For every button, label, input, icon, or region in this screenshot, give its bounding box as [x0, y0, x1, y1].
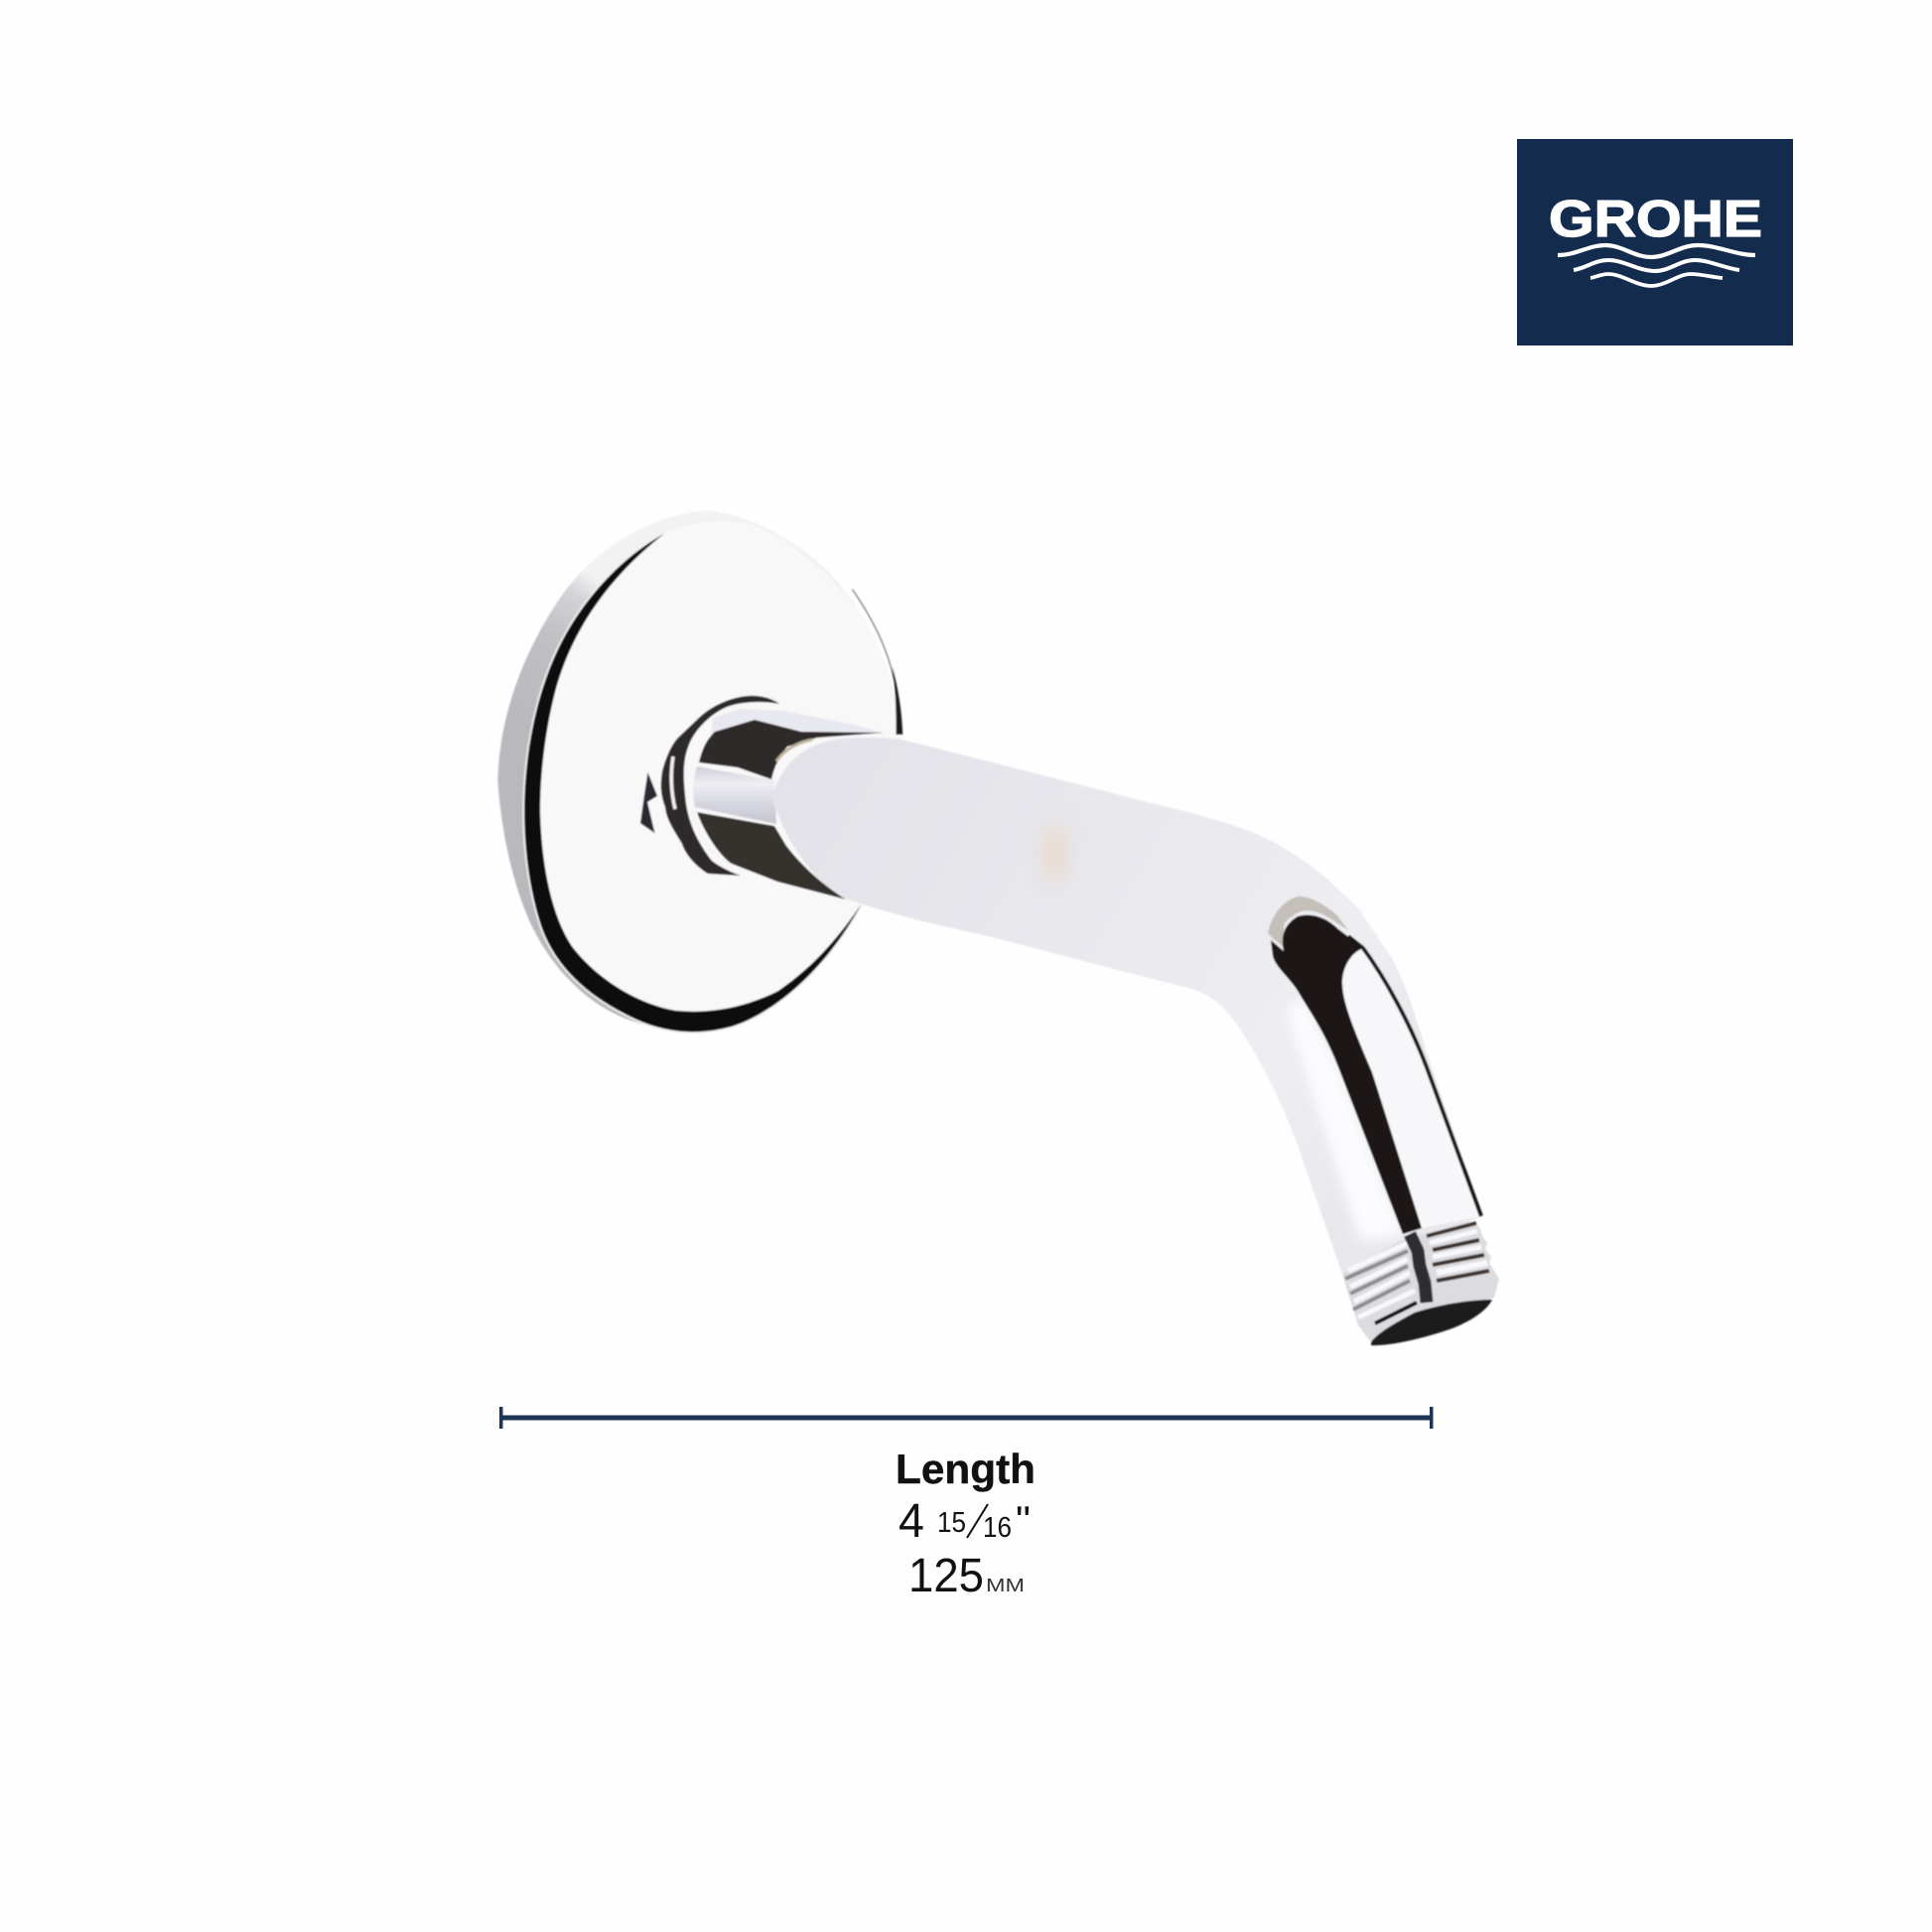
neck dark lower — [697, 812, 846, 899]
nut and neck — [661, 696, 884, 899]
nut crescent — [661, 696, 779, 876]
flange rim — [497, 510, 902, 1033]
heading: Length: Length — [896, 1446, 1035, 1492]
length in inches: 16 — [983, 1512, 1012, 1544]
logo background — [1517, 139, 1793, 345]
nut inner white line — [692, 809, 732, 866]
dimension label — [896, 1446, 1035, 1602]
arm body — [772, 738, 1482, 1274]
tube right bright strip — [1342, 948, 1481, 1228]
flange dark crescent reflection — [524, 533, 861, 1032]
neck bronze highlight — [776, 740, 812, 761]
dimension line — [499, 1407, 1434, 1429]
tube right edge line — [1348, 936, 1481, 1216]
lower tube reflections — [1268, 897, 1481, 1241]
length in millimetres: MM — [986, 1576, 1025, 1595]
thread ridges — [1345, 1223, 1489, 1323]
neck silver middle — [693, 766, 776, 824]
nut inner highlight — [671, 757, 675, 809]
length in millimetres — [908, 1550, 1025, 1602]
length in inches — [898, 1495, 1031, 1548]
pipe opening — [1371, 1300, 1492, 1345]
arm smudge — [1040, 824, 1068, 884]
flange right edge thick — [893, 666, 902, 735]
length in inches: " — [1016, 1499, 1031, 1543]
logo waves — [1558, 245, 1755, 286]
wall flange plate — [497, 510, 902, 1033]
tube left bright band — [1287, 996, 1405, 1241]
logo: GROHE — [1517, 139, 1793, 345]
logo wordmark: GROHE — [1549, 191, 1762, 248]
length in millimetres: 125 — [908, 1550, 984, 1602]
tube dark streak — [1271, 915, 1422, 1234]
flange face — [540, 521, 901, 1012]
threaded end — [1342, 1221, 1499, 1345]
set screw slot — [640, 772, 657, 833]
flange right edge line — [853, 590, 895, 681]
product photo: shower arm with flange — [497, 510, 1499, 1345]
tube bronze highlight — [1268, 897, 1348, 948]
length in inches: 15 — [937, 1507, 966, 1539]
neck upper light band — [711, 709, 884, 737]
length in inches: 4 — [898, 1495, 924, 1548]
neck dark upper — [699, 720, 884, 779]
